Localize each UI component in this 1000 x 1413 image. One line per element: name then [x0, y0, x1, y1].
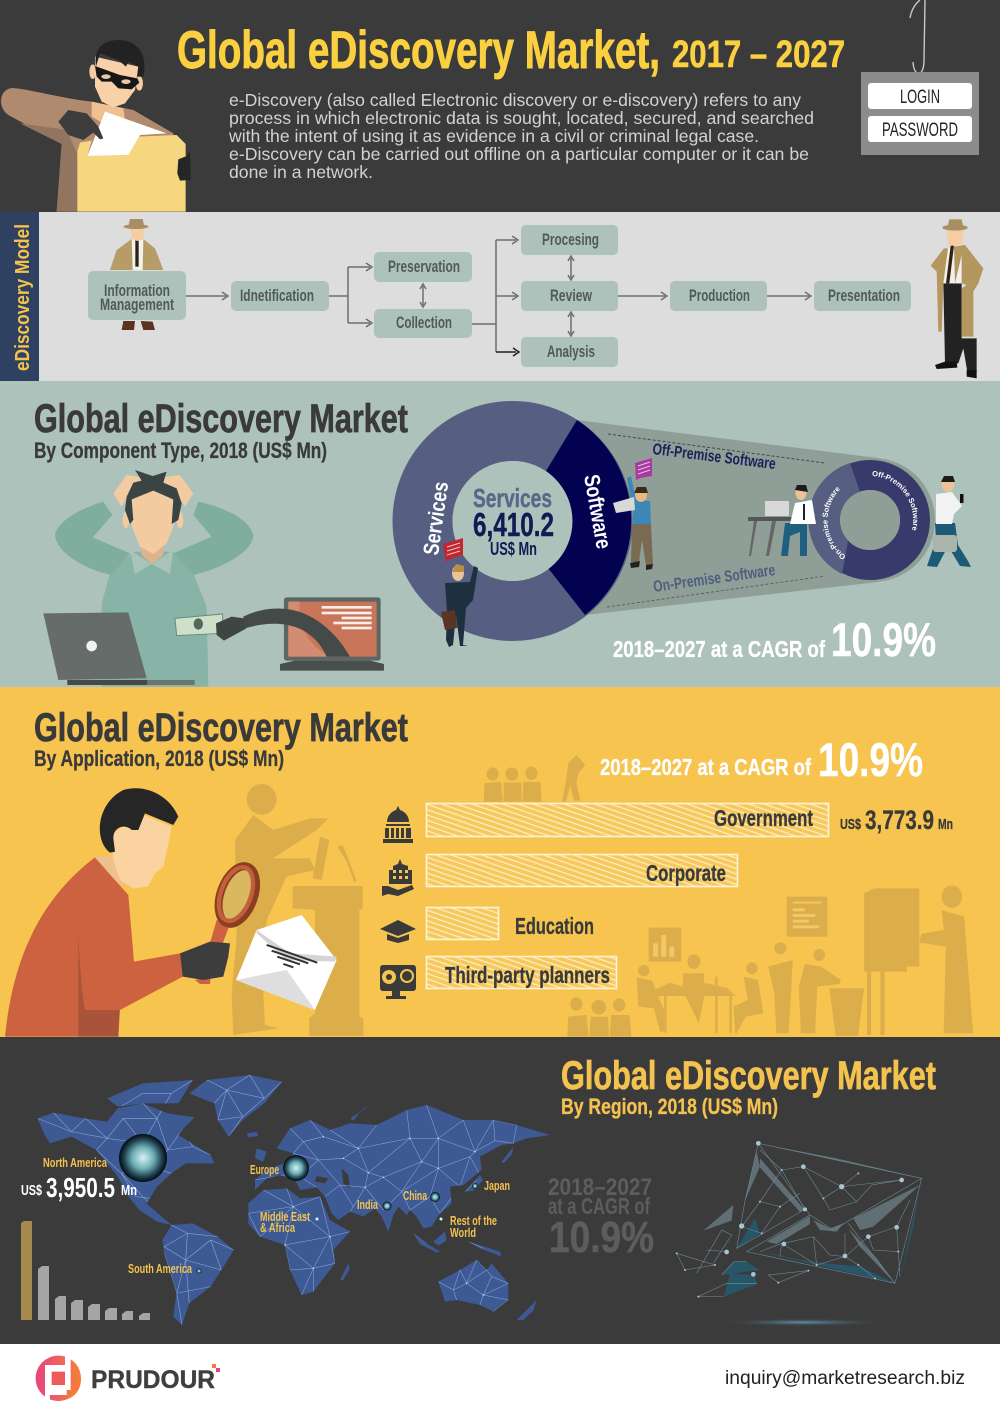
- heading: eDiscovery Model: eDiscovery Model: [12, 224, 34, 371]
- logo wordmark: PRUDOUR: [91, 1366, 215, 1394]
- map labels: [43, 1156, 510, 1276]
- text block: definition: with the intent of using it as evidence in a civil or criminal legal case.: [228, 126, 759, 146]
- flow box labels: Information: [104, 281, 170, 300]
- contact email: inquiry@marketresearch.biz: [725, 1368, 965, 1389]
- CAGR label: at a CAGR of: [548, 1193, 650, 1219]
- donut labels: 6,410.2: [473, 506, 554, 543]
- CAGR label: 2018–2027: [548, 1174, 652, 1201]
- icon: graduation cap: [380, 920, 416, 943]
- bar chart: application: Government: [714, 805, 813, 831]
- bar chart: application: Mn: [938, 816, 953, 833]
- bar chart: application: Corporate: [646, 860, 726, 886]
- map labels: South America: [128, 1262, 193, 1276]
- bar chart: application: US$: [840, 816, 861, 833]
- map: Americas and Greenland: [37, 1075, 282, 1325]
- login panel: PASSWORD: [882, 120, 958, 141]
- flow box labels: Management: [100, 295, 174, 314]
- illustration: stressed man with stolen money: [43, 470, 384, 687]
- flow box labels: Procesing: [542, 230, 599, 249]
- text block: definition: e-Discovery (also called Electronic discovery or e-discovery) refers to any: [229, 90, 801, 110]
- illustration: man with megaphone: [613, 458, 653, 570]
- map: Old World and Oceania: [247, 1103, 550, 1320]
- login panel: LOGIN: [900, 87, 940, 108]
- map labels: India: [357, 1198, 379, 1212]
- heading: Global eDiscovery Market: [34, 706, 408, 750]
- illustration: masked thief with folder: [1, 40, 191, 212]
- silhouette: speaker at podium: [232, 784, 363, 1036]
- bubble markers: [119, 1134, 478, 1274]
- title: Global eDiscovery Market,: [177, 21, 660, 80]
- map labels: Japan: [484, 1179, 510, 1193]
- CAGR label: [548, 1174, 654, 1262]
- logo: Prudour mark: [36, 1355, 81, 1403]
- CAGR label: 10.9%: [549, 1213, 654, 1262]
- map labels: Rest of the: [450, 1214, 497, 1228]
- flow box labels: [100, 230, 900, 361]
- panel: footer: [0, 1344, 1000, 1413]
- map labels: Middle East: [260, 1210, 311, 1224]
- illustration: detective in trench coat: [931, 219, 983, 378]
- heading: Global eDiscovery Market: [34, 397, 408, 441]
- arrows: flow connectors: [186, 236, 811, 356]
- CAGR label: [600, 733, 923, 786]
- donut labels: Software: [579, 473, 617, 551]
- flow box labels: Preservation: [388, 257, 460, 276]
- bar chart: application: Education: [515, 913, 594, 939]
- bar chart: application: 3,773.9: [865, 805, 934, 835]
- chart: zoom cone: [577, 420, 935, 615]
- subheading: By Component Type, 2018 (US$ Mn): [34, 438, 327, 463]
- donut labels: US$ Mn: [490, 539, 537, 559]
- login panel: [861, 72, 979, 155]
- map labels: Europe: [250, 1163, 279, 1177]
- zoom cone labels: On-Premise Software: [652, 562, 776, 596]
- CAGR label: 2018–2027 at a CAGR of: [600, 754, 811, 780]
- zoom cone labels: [607, 434, 825, 607]
- subheading: By Application, 2018 (US$ Mn): [34, 746, 284, 771]
- icon: fishing hook: [910, 0, 925, 74]
- flow box labels: Production: [689, 286, 750, 305]
- illustration: businessman with speech bubble: [441, 538, 478, 647]
- CAGR label: 10.9%: [831, 613, 936, 666]
- panel: component type: [0, 381, 1000, 687]
- silhouettes: audience and meeting: [484, 755, 973, 1037]
- subheading: By Region, 2018 (US$ Mn): [561, 1094, 778, 1119]
- donut labels: Services: [473, 483, 552, 513]
- icon: government building: [383, 806, 413, 843]
- icon: building in hand: [382, 859, 414, 896]
- map labels: China: [403, 1189, 428, 1203]
- flow box labels: Analysis: [547, 342, 595, 361]
- North America value: US$: [21, 1182, 42, 1199]
- CAGR label: [613, 613, 936, 666]
- donut labels: [418, 473, 617, 559]
- map labels: World: [450, 1226, 476, 1240]
- panel: header: [0, 0, 1000, 212]
- zoom cone labels: Off-Premise Software: [652, 441, 777, 473]
- CAGR label: 10.9%: [818, 733, 923, 786]
- panel: application: [0, 687, 1000, 1037]
- text block: definition: e-Discovery can be carried out offline on a particular computer or it can be: [229, 144, 809, 164]
- illustration: walking man with phone: [927, 476, 971, 567]
- map labels: & Africa: [260, 1221, 296, 1235]
- chart: software split donut: On-Premise Software: [822, 487, 845, 559]
- bar chart: application: Third-party planners: [445, 962, 610, 988]
- illustration: investigator with magnifying glass: [5, 788, 337, 1037]
- icon: monitor with magnifier: [380, 965, 416, 999]
- illustration: detective behind info box: [110, 219, 163, 330]
- flow box labels: Review: [550, 286, 593, 305]
- title years: 2017 – 2027: [672, 34, 845, 76]
- chart: software split donut: Off-Premise Software: [872, 471, 918, 530]
- chart: main donut: [418, 420, 631, 615]
- flow box labels: Presentation: [828, 286, 900, 305]
- bar chart: regions: [21, 1221, 150, 1320]
- illustration: wireframe envelope: [676, 1141, 922, 1326]
- donut labels: Services: [418, 480, 453, 557]
- text block: definition: process in which electronic data is sought, located, secured, and searched: [229, 108, 814, 128]
- panel: eDiscovery model: [0, 212, 1000, 381]
- flow box labels: Collection: [396, 313, 452, 332]
- CAGR label: 2018–2027 at a CAGR of: [613, 636, 825, 662]
- panel: region: [21, 1060, 936, 1325]
- flow boxes: [88, 225, 911, 367]
- chart: software split donut: [808, 460, 930, 580]
- text block: definition: [228, 90, 814, 182]
- North America value: Mn: [121, 1182, 137, 1199]
- illustration: worker at desk: [748, 485, 817, 556]
- map labels: North America: [43, 1156, 108, 1170]
- flow box labels: Idnetification: [240, 286, 314, 305]
- North America value: 3,950.5: [46, 1172, 115, 1203]
- bar chart: application: [426, 804, 953, 988]
- text block: definition: done in a network.: [229, 162, 373, 182]
